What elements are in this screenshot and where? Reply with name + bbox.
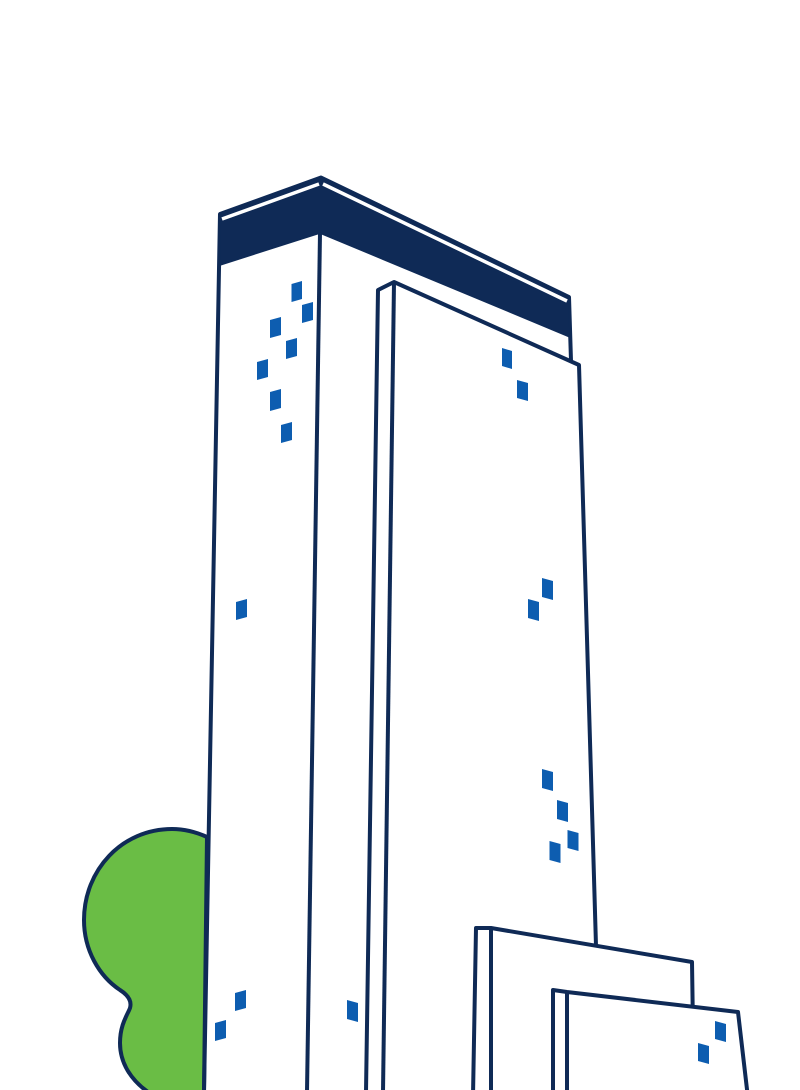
main tower: [204, 178, 571, 1090]
tower corner edge: [307, 233, 320, 1090]
tree: [84, 829, 207, 1090]
podium building, front: [553, 990, 748, 1090]
roof band: [220, 178, 570, 337]
podium building, rear: [473, 928, 694, 1090]
tower outer outline: [204, 178, 571, 1090]
windows: left face: [215, 281, 313, 1041]
windows: right face: [347, 348, 726, 1064]
front wing of tower: [366, 282, 596, 1090]
